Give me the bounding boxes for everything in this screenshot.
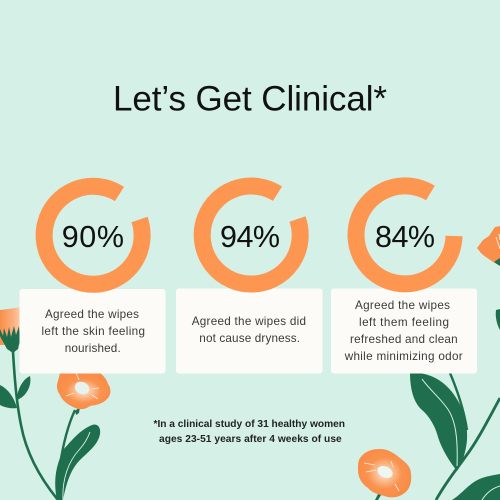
leaf: right edge small [496,309,500,330]
icon: partial flower behind first card [0,307,22,353]
card 1 text: Agreed the wipes [45,308,139,321]
card 3 text: left them feeling [359,316,449,329]
leaf vein [63,432,90,500]
chart: 84% ring [356,186,454,284]
icon: bottom flower [358,449,411,500]
leaf: small left [0,385,17,408]
stem: middle flower [60,410,75,465]
leaf vein [422,379,457,466]
icon: middle flower [57,373,110,415]
stem: left main [13,352,58,500]
chart: 84% ring: 84% [375,220,435,254]
panel: card 2 [176,288,322,374]
card 1 text [42,308,145,355]
card 3 text [344,299,463,363]
footnote: ages 23-51 years after 4 weeks of use [159,434,342,445]
card 1 text: nourished. [65,342,121,355]
chart: 94% ring: 94% [220,220,280,254]
right floral illustration [358,226,500,500]
panel: card 1 [20,289,166,374]
chart: 94% ring [202,186,300,284]
leaf: large bottom [55,425,100,500]
card 3 text: while minimizing odor [344,350,463,363]
card 2 text: Agreed the wipes did [192,315,306,328]
footnote: *In a clinical study of 31 healthy women [154,419,345,430]
left floral illustration [0,307,110,500]
card 2 text [192,315,306,345]
panel: card 3 [331,288,477,374]
footnote [154,419,345,445]
leaf vein bottom [482,486,500,500]
leaf: large right [410,373,467,471]
chart: 90% ring: 90% [62,220,124,254]
leaf: bottom right [452,474,500,500]
card 2 text: not cause dryness. [199,332,300,345]
chart: 90% ring [44,186,142,284]
stem: behind large leaf [450,373,467,430]
title: Let’s Get Clinical* [113,80,387,118]
stem: right main [436,398,500,500]
card 1 text: left the skin feeling [42,325,145,338]
icon: right edge flower [477,226,500,266]
card 3 text: Agreed the wipes [355,299,450,312]
leaf: small right [17,376,30,400]
card 3 text: refreshed and clean [350,333,458,346]
